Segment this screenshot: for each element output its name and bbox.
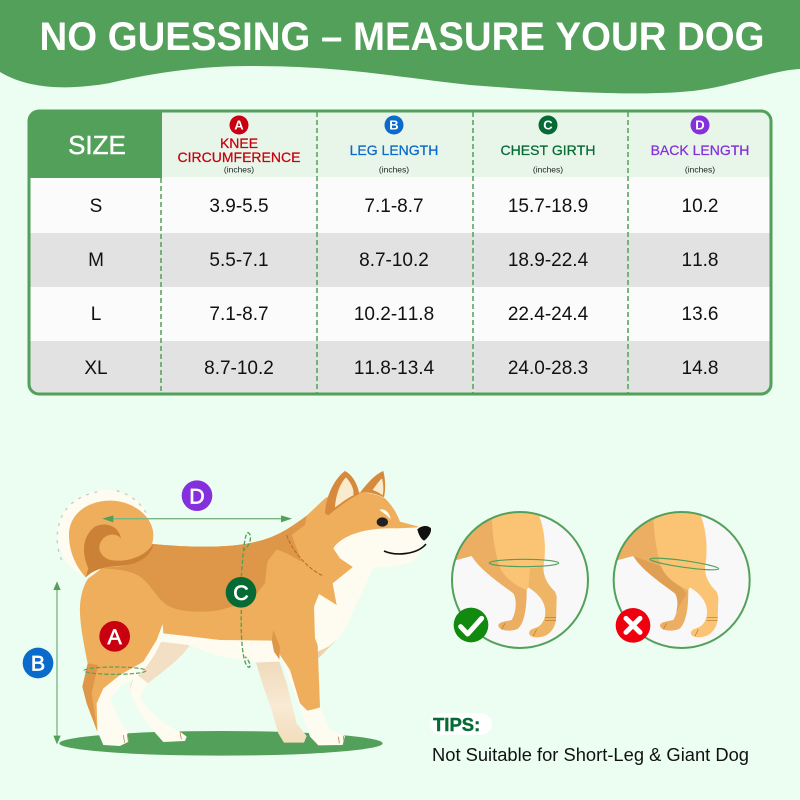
badge B [23, 648, 53, 678]
tips heading: TIPS: [433, 714, 480, 735]
row XL: 11.8-13.4 [354, 358, 435, 379]
size header: SIZE [68, 130, 126, 160]
column B header: B [389, 118, 399, 132]
row S: 7.1-8.7 [364, 196, 424, 217]
far front leg [256, 662, 307, 743]
column D header [651, 116, 749, 174]
size table [28, 110, 772, 395]
badge C [226, 577, 256, 608]
knee ring [84, 667, 146, 674]
correct fit circle [443, 510, 588, 648]
front leg shading [272, 630, 280, 659]
tail fur [57, 490, 153, 577]
white muzzle [333, 527, 425, 567]
row M: M [88, 250, 104, 271]
row S: 15.7-18.9 [508, 196, 588, 217]
row M: 5.5-7.1 [209, 250, 269, 271]
ring: bad fit [650, 556, 719, 572]
row S [90, 196, 718, 217]
arrow D [102, 515, 292, 522]
ground ellipse [59, 731, 383, 756]
row S: 10.2 [682, 196, 718, 217]
column C header [501, 116, 595, 174]
tail [69, 501, 153, 577]
row M: 11.8 [682, 250, 718, 271]
row L: L [91, 304, 101, 325]
row L: 7.1-8.7 [209, 304, 269, 325]
cross badge [616, 608, 650, 643]
title: NO GUESSING – MEASURE YOUR DOG [40, 15, 764, 59]
row S: S [90, 196, 102, 217]
near front leg white [280, 655, 345, 745]
tail swirl [84, 524, 153, 577]
chest orange edge [318, 640, 337, 658]
body [80, 492, 418, 732]
row L [91, 304, 718, 325]
eye [377, 509, 391, 527]
far hind leg [130, 640, 190, 742]
chest ring [241, 533, 251, 667]
column B header: LEG LENGTH [350, 142, 438, 158]
collar mark [287, 535, 323, 576]
column A header: (inches) [224, 164, 254, 174]
far ear [360, 471, 385, 497]
row XL [84, 358, 718, 379]
row XL: 24.0-28.3 [508, 358, 588, 379]
badge D: D [189, 484, 205, 508]
ring: good fit [489, 559, 559, 567]
nose [417, 526, 431, 541]
column D header: D [695, 118, 705, 132]
row M: 8.7-10.2 [359, 250, 429, 271]
row XL: 14.8 [682, 358, 718, 379]
column D header: (inches) [685, 164, 715, 174]
column B header: (inches) [379, 164, 409, 174]
badge C: C [233, 581, 249, 605]
row S: 3.9-5.5 [209, 196, 269, 217]
saddle shading [103, 516, 307, 612]
column A header: KNEE [220, 135, 258, 151]
column C header: CHEST GIRTH [501, 142, 595, 158]
hind leg shading [82, 663, 98, 732]
chest white [313, 565, 374, 658]
badge B: B [31, 652, 45, 676]
header banner [0, 0, 800, 93]
row M [88, 250, 718, 271]
column D header: BACK LENGTH [651, 142, 749, 158]
check badge [454, 608, 488, 642]
badge D [182, 480, 212, 511]
belly white [160, 633, 280, 662]
badge A: A [108, 625, 123, 649]
wrong fit circle [605, 510, 750, 648]
row L: 10.2-11.8 [354, 304, 434, 325]
row M: 18.9-22.4 [508, 250, 589, 271]
column A header: A [234, 118, 244, 132]
column C header: (inches) [533, 164, 563, 174]
row XL: 8.7-10.2 [204, 358, 274, 379]
column B header [350, 116, 438, 174]
near hind leg white [96, 624, 163, 746]
row L: 22.4-24.4 [508, 304, 589, 325]
mouth [384, 544, 426, 554]
column C header: C [543, 118, 553, 132]
column A header: CIRCUMFERENCE [178, 149, 300, 165]
row L: 13.6 [682, 304, 718, 325]
column A header [178, 116, 300, 174]
outer ear [325, 471, 359, 515]
paw marks [123, 732, 344, 743]
arrow B [53, 581, 61, 744]
badge A [99, 621, 130, 652]
tips text: Not Suitable for Short-Leg & Giant Dog [432, 745, 749, 765]
row XL: XL [84, 358, 108, 379]
dog illustration [23, 471, 431, 756]
